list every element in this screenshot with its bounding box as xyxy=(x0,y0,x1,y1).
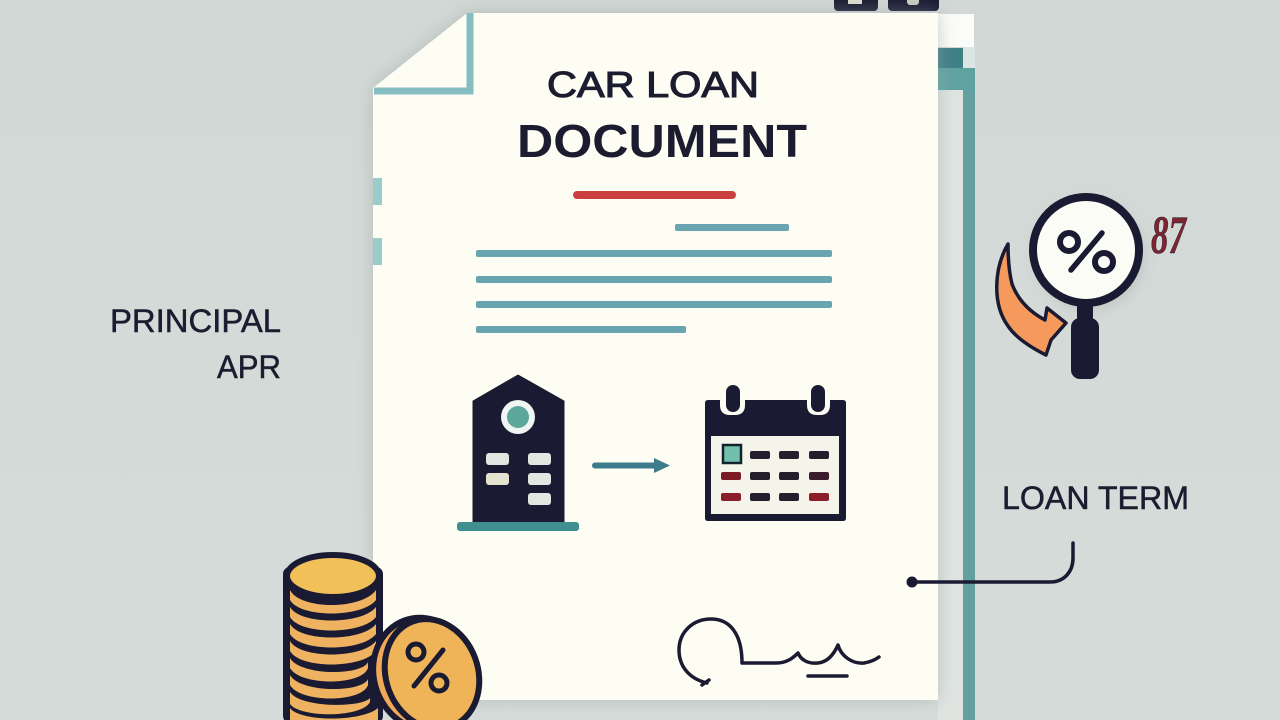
signature xyxy=(679,619,879,685)
arrow: bank to calendar xyxy=(595,458,670,473)
binder clips at top xyxy=(834,0,939,11)
percent sign xyxy=(1060,233,1113,271)
label: principal: PRINCIPAL xyxy=(110,303,281,339)
title: CAR LOAN xyxy=(547,64,759,105)
magnifier handle xyxy=(1071,296,1099,379)
side tabs xyxy=(373,178,382,265)
label: APR: APR xyxy=(217,349,281,385)
curved orange arrow xyxy=(997,244,1066,355)
magnifier shadow xyxy=(1036,202,1144,310)
title: DOCUMENT xyxy=(517,115,807,167)
paper shadow xyxy=(373,13,938,700)
icon: calendar xyxy=(705,385,846,521)
document page xyxy=(373,13,938,700)
folded corner xyxy=(374,13,470,91)
icon: percent coin xyxy=(358,603,494,720)
label: loan term: LOAN TERM xyxy=(1002,480,1189,516)
icon: coin stack xyxy=(286,555,380,720)
icon: magnifier with percent xyxy=(997,197,1144,379)
title xyxy=(517,64,807,167)
magnifier lens xyxy=(1033,197,1139,303)
icon: bank building xyxy=(457,375,579,531)
callout: loan term leader xyxy=(906,543,1073,588)
garbled rate figure: 87 xyxy=(1151,205,1187,265)
red title underline xyxy=(573,191,736,199)
text lines xyxy=(476,224,832,333)
back sheet binder strip xyxy=(938,14,975,720)
